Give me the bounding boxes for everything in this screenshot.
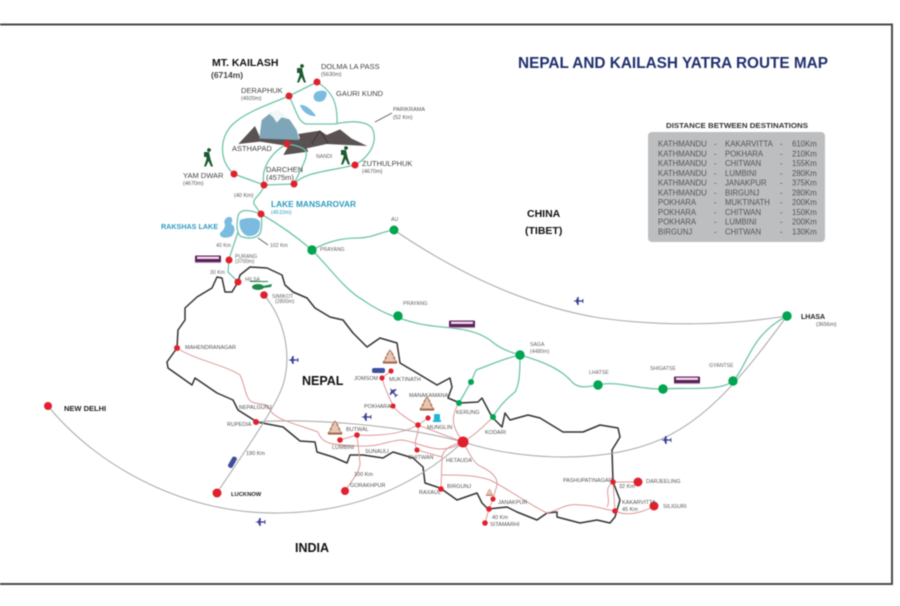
table rows: - xyxy=(780,159,783,168)
table rows: LUMBINI xyxy=(725,169,757,178)
table rows: 210Km xyxy=(792,149,817,158)
Nepal place labels: 40 Km xyxy=(492,515,508,521)
Nepal place labels: GORAKHPUR xyxy=(350,483,385,489)
route: Au to Lhasa xyxy=(394,230,787,324)
Nepal place labels: 100 Km xyxy=(354,472,373,478)
Nepal place labels: JANAKPUR xyxy=(498,500,527,506)
Nepal place labels: MAHENDRANAGAR xyxy=(185,345,236,351)
Nepal border xyxy=(167,267,620,523)
altitude labels: (4510m) xyxy=(271,210,292,216)
altitude labels: (4670m) xyxy=(183,181,204,187)
route: Kathmandu to Kerung xyxy=(453,403,463,442)
route: Saga to Kerung xyxy=(459,355,520,403)
route: Jomsom to Mungling xyxy=(382,371,428,425)
big labels: LAKE MANSAROVAR xyxy=(271,200,356,209)
table rows: KATHMANDU xyxy=(658,178,707,188)
table rows: KAKARVITTA xyxy=(725,140,774,148)
table rows: BIRGUNJ xyxy=(658,227,692,236)
table rows: POKHARA xyxy=(658,198,697,207)
table rows: - xyxy=(714,178,717,188)
table heading: DISTANCE BETWEEN DESTINATIONS xyxy=(666,121,808,130)
table rows: 200Km xyxy=(792,218,817,226)
table rows: - xyxy=(714,218,717,226)
altitude labels: (3656m) xyxy=(816,322,837,328)
table rows: - xyxy=(780,140,783,148)
table rows: KATHMANDU xyxy=(658,149,707,158)
table rows: KATHMANDU xyxy=(658,159,707,168)
Nepal place labels: 45 Km xyxy=(622,507,638,513)
table rows: POKHARA xyxy=(658,218,697,226)
route: Saga to Kodari xyxy=(493,355,520,417)
Nepal place labels: MUNGLIN xyxy=(427,425,452,431)
Nepal place labels: SUNAULI xyxy=(365,449,389,455)
Nepal place labels: KAKARVITTA xyxy=(622,500,656,506)
Nepal place labels xyxy=(185,345,687,528)
altitude labels: (40 Km) xyxy=(234,193,254,199)
Nepal place labels: BUTWAL xyxy=(346,427,369,433)
red nodes xyxy=(44,78,658,526)
big labels: INDIA xyxy=(295,541,329,555)
icon: buses xyxy=(195,256,700,384)
red Nepal routes xyxy=(177,348,654,523)
table rows: KATHMANDU xyxy=(658,169,707,178)
table rows: - xyxy=(714,208,717,217)
Nepal place labels: 190 Km xyxy=(246,451,265,457)
table rows: - xyxy=(780,169,783,178)
small labels xyxy=(210,154,734,376)
table rows: MUKTINATH xyxy=(725,198,770,207)
icon: cable car xyxy=(433,414,441,422)
Kailash place labels: YAM DWAR xyxy=(183,171,224,180)
small labels: (3700m) xyxy=(235,259,255,265)
table rows: - xyxy=(780,227,783,236)
Nepal place labels: JOMSOM xyxy=(354,376,379,382)
small labels: (4480m) xyxy=(530,349,550,355)
altitude labels: PARIKRAMA xyxy=(393,107,425,113)
route: New Delhi to Kathmandu xyxy=(48,406,463,513)
route: Prayang to Au xyxy=(312,230,394,250)
route: Kathmandu to Sitamarhi xyxy=(463,442,497,523)
small labels: SHIGATSE xyxy=(650,366,676,372)
Nepal place labels: SILIGURI xyxy=(663,504,687,510)
Nepal place labels: RUPEDIA xyxy=(227,422,252,428)
route: Dolma to Parikrama xyxy=(317,82,337,124)
lakes xyxy=(220,91,327,238)
table rows: 610Km xyxy=(792,140,817,148)
green nodes xyxy=(307,226,792,420)
teal Tibet routes xyxy=(222,82,787,417)
Nepal place labels: BIRGUNJ xyxy=(447,484,471,490)
Nepal place labels: MUKTINATH xyxy=(389,377,421,383)
lake: Gauri Kund xyxy=(314,91,327,102)
route: Kathmandu to Kodari xyxy=(463,417,493,442)
small labels: LHATSE xyxy=(589,370,609,376)
small labels: PURANG xyxy=(235,254,257,260)
small labels: GYANTSE xyxy=(709,363,734,369)
route: lake circuit xyxy=(237,210,262,238)
route: Kathmandu to Raxaul xyxy=(441,442,463,489)
altitude labels: (4670m) xyxy=(362,169,383,175)
Nepal place labels: RAXAUL xyxy=(419,490,441,496)
Nepal place labels: HETAUDA xyxy=(446,458,472,464)
route: Mahendranagar to Kathmandu xyxy=(177,348,463,449)
table rows: POKHARA xyxy=(725,149,764,158)
table rows: 155Km xyxy=(792,159,817,168)
small labels: PRAYANG xyxy=(320,247,345,253)
Nepal place labels: CHITWAN xyxy=(408,455,433,461)
big labels: (6714m) xyxy=(211,70,243,80)
route: Darchen to Mansarovar xyxy=(254,185,264,214)
route: lake to Purang xyxy=(228,232,238,282)
table rows: - xyxy=(714,169,717,178)
route: Asthapad inner loop xyxy=(263,144,306,185)
table rows: - xyxy=(714,140,717,148)
Nepal place labels: KODARI xyxy=(485,430,507,436)
small labels: HILSA xyxy=(245,277,261,283)
small labels: 30 Km xyxy=(210,270,225,276)
altitude labels xyxy=(183,72,837,328)
big labels: (TIBET) xyxy=(525,225,562,237)
icon: helicopter xyxy=(250,281,272,290)
big labels: NEPAL xyxy=(302,374,344,388)
small labels: (2800m) xyxy=(275,299,295,305)
table rows: - xyxy=(714,159,717,168)
Nepal place labels: PASHUPATINAGAR xyxy=(563,478,613,484)
Kailash place labels: GAURI KUND xyxy=(336,89,384,98)
big labels xyxy=(64,57,825,555)
small labels: 40 Km xyxy=(216,243,231,249)
table rows: - xyxy=(780,149,783,158)
route: Mungling to Chitwan xyxy=(415,425,442,457)
table rows: KATHMANDU xyxy=(658,188,707,197)
big labels: NEW DELHI xyxy=(64,404,106,413)
table rows: - xyxy=(714,149,717,158)
big labels: LHASA xyxy=(801,314,825,321)
Kailash place labels: DERAPHUK xyxy=(241,86,283,95)
Nepal place labels: DARJEELING xyxy=(646,479,681,485)
big labels: CHINA xyxy=(527,208,561,220)
small labels: NANDI xyxy=(316,154,332,160)
lake: Rakshas xyxy=(220,217,234,238)
small labels: 102 Km xyxy=(270,243,288,249)
Nepal place labels: SITAMARHI xyxy=(490,522,520,528)
table rows: - xyxy=(714,227,717,236)
table rows: - xyxy=(780,178,783,188)
grey flight routes xyxy=(48,230,787,513)
table rows: 130Km xyxy=(792,227,817,236)
route: Kakarvitta to Pashupatinagar xyxy=(607,482,638,507)
Nepal place labels: MANAKAMANA xyxy=(409,393,448,399)
table rows: CHITWAN xyxy=(725,159,761,168)
table rows: 280Km xyxy=(792,169,817,178)
small labels: SAGA xyxy=(530,342,545,348)
table rows: POKHARA xyxy=(658,208,697,217)
Nepal place labels: LUMBINI xyxy=(332,445,355,451)
table rows: - xyxy=(780,198,783,207)
route: Mansarovar to Prayang xyxy=(261,214,312,250)
table panel xyxy=(648,132,825,242)
route: Saga to Lhasa xyxy=(520,316,787,389)
altitude labels: (52 Km) xyxy=(393,115,413,121)
route: Parikrama outer loop xyxy=(222,82,374,185)
table rows: - xyxy=(780,218,783,226)
icon: temples xyxy=(328,350,493,496)
route: Kathmandu to Lhasa xyxy=(463,316,787,457)
icon: hikers xyxy=(204,64,350,166)
table rows: CHITWAN xyxy=(725,227,761,236)
table rows: JANAKPUR xyxy=(725,178,767,188)
route: Simikot to Lucknow xyxy=(217,295,287,493)
table rows: BIRGUNJ xyxy=(725,188,759,197)
Kailash place labels: (4575m) xyxy=(266,173,294,182)
big labels: LUCKNOW xyxy=(231,492,262,498)
table rows: CHITWAN xyxy=(725,208,761,217)
table rows: 200Km xyxy=(792,198,817,207)
Kailash place labels: DOLMA LA PASS xyxy=(321,62,380,71)
Kailash place labels: DARCHEN xyxy=(266,165,303,174)
icon: vehicles xyxy=(227,368,385,469)
lake: small pond xyxy=(300,105,316,116)
route: Hetauda to Kakarvitta xyxy=(442,475,615,513)
lake: Mansarovar xyxy=(239,218,260,236)
small labels: SIMIKOT xyxy=(272,294,294,300)
leader lines xyxy=(258,113,392,245)
distance table xyxy=(648,121,825,242)
small labels: AU xyxy=(391,217,398,223)
route: Prayang to Saga xyxy=(312,250,520,355)
table rows: 375Km xyxy=(792,178,817,188)
table rows: LUMBINI xyxy=(725,218,757,226)
Kailash place labels: ASTHAPAD xyxy=(232,144,272,153)
Nepal place labels: KERUNG xyxy=(456,410,480,416)
table rows: - xyxy=(780,208,783,217)
table rows xyxy=(658,140,817,236)
table rows: - xyxy=(714,198,717,207)
Kailash place labels xyxy=(183,62,412,182)
table rows: KATHMANDU xyxy=(658,140,707,148)
table rows: 280Km xyxy=(792,188,817,197)
route: Kakarvitta to Siliguri xyxy=(613,482,654,514)
Nepal place labels: NEPALGUNJ xyxy=(239,405,272,411)
title: NEPAL AND KAILASH YATRA ROUTE MAP xyxy=(518,55,828,72)
Nepal place labels: 32 Km xyxy=(619,484,635,490)
route: Butwal to Kathmandu xyxy=(340,425,463,442)
icon: planes xyxy=(255,297,672,526)
altitude labels: (4920m) xyxy=(241,96,262,102)
table rows: - xyxy=(780,188,783,197)
big labels: MT. KAILASH xyxy=(212,57,278,69)
Nepal place labels: POKHARA xyxy=(364,404,391,410)
Kailash place labels: ZUTHULPHUK xyxy=(362,159,412,168)
table rows: - xyxy=(714,188,717,197)
small labels: PRAYANG xyxy=(403,301,428,307)
route: Gorakhpur to Butwal xyxy=(345,435,360,491)
altitude labels: (5630m) xyxy=(321,72,342,78)
route: Rupedia to Kathmandu xyxy=(256,421,463,442)
big labels: RAKSHAS LAKE xyxy=(161,222,218,231)
table rows: 150Km xyxy=(792,208,817,217)
icon: Mt. Kailash mountain xyxy=(238,109,367,155)
